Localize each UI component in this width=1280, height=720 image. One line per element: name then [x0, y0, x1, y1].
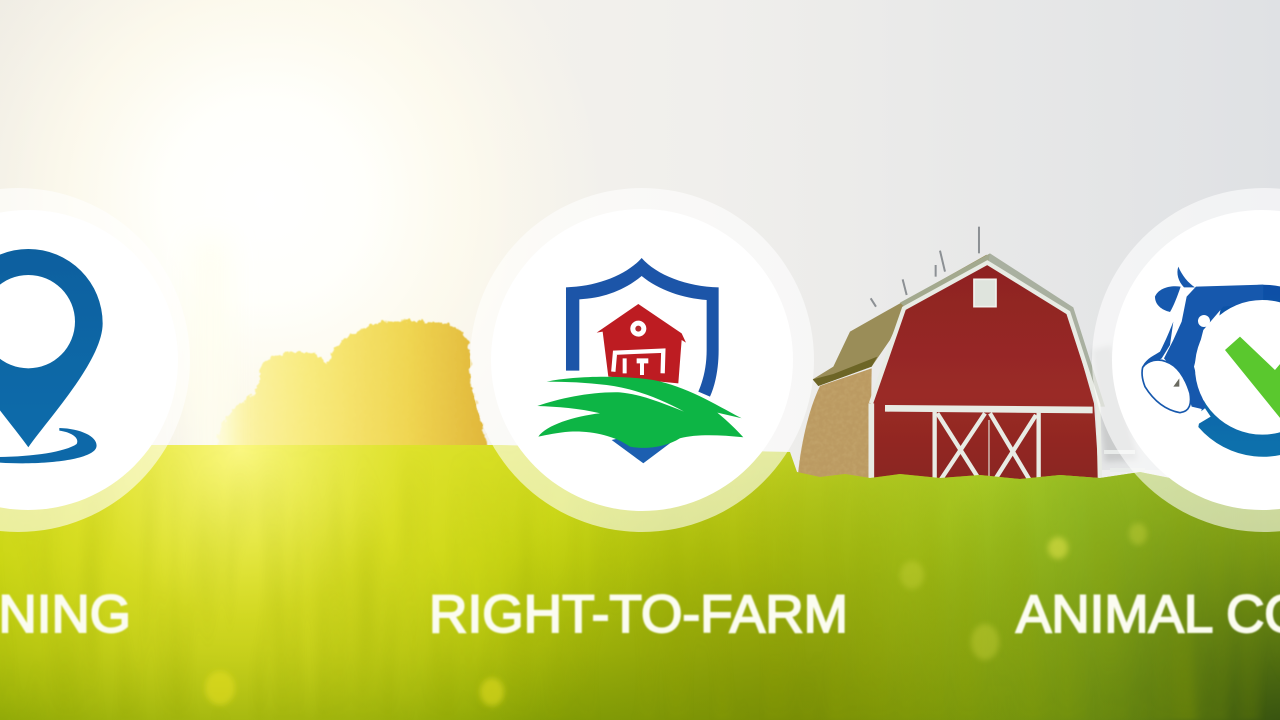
background: green field	[0, 445, 1280, 720]
barn door frame	[613, 351, 663, 373]
side roof	[813, 253, 990, 386]
bokeh light spots	[205, 523, 1147, 706]
label: right-to-farm: RIGHT-TO-FARM	[429, 585, 848, 644]
green check	[1225, 337, 1280, 420]
right roof edge	[988, 253, 1105, 407]
cow nostril	[1173, 378, 1179, 387]
icon: cow with check	[1142, 267, 1280, 457]
ring	[1198, 285, 1280, 457]
cow head	[1142, 360, 1191, 413]
cow eye spot	[1198, 315, 1210, 327]
background: distant grey tree and fence	[1092, 345, 1145, 470]
center circle halo	[470, 188, 814, 532]
right circle disc	[1112, 210, 1280, 510]
hay wall	[790, 363, 877, 483]
barn door split	[986, 420, 991, 483]
icon: location pin	[0, 249, 103, 463]
cow forehead	[1143, 322, 1173, 367]
right circle: animal confinement	[1092, 188, 1280, 532]
center circle: right-to-farm	[470, 188, 814, 532]
left circle disc	[0, 210, 178, 510]
shield base	[612, 433, 677, 463]
background: sun beam	[192, 240, 228, 500]
barn facade	[872, 263, 1099, 483]
barn round window	[630, 321, 646, 337]
right circle halo	[1092, 188, 1280, 532]
green field	[537, 377, 743, 448]
gap between cow and ring	[1190, 408, 1211, 425]
barn roof antennas	[871, 227, 979, 307]
barn window	[974, 279, 996, 307]
left circle halo	[0, 188, 190, 532]
center circle disc	[491, 209, 793, 511]
shield outline	[566, 258, 719, 397]
cow horn	[1177, 267, 1195, 287]
left circle: zoning	[0, 188, 190, 532]
icon: shield with barn and field	[537, 258, 743, 463]
background: sunlit trees	[217, 321, 488, 448]
cow ear	[1155, 286, 1181, 312]
white inner circle	[1195, 300, 1280, 435]
small red barn	[597, 304, 686, 383]
background: sky with sun glow	[0, 0, 1280, 470]
label: zoning: NING	[0, 585, 131, 644]
red barn	[790, 227, 1105, 483]
cow body	[1164, 285, 1263, 410]
barn trim	[871, 263, 1100, 483]
